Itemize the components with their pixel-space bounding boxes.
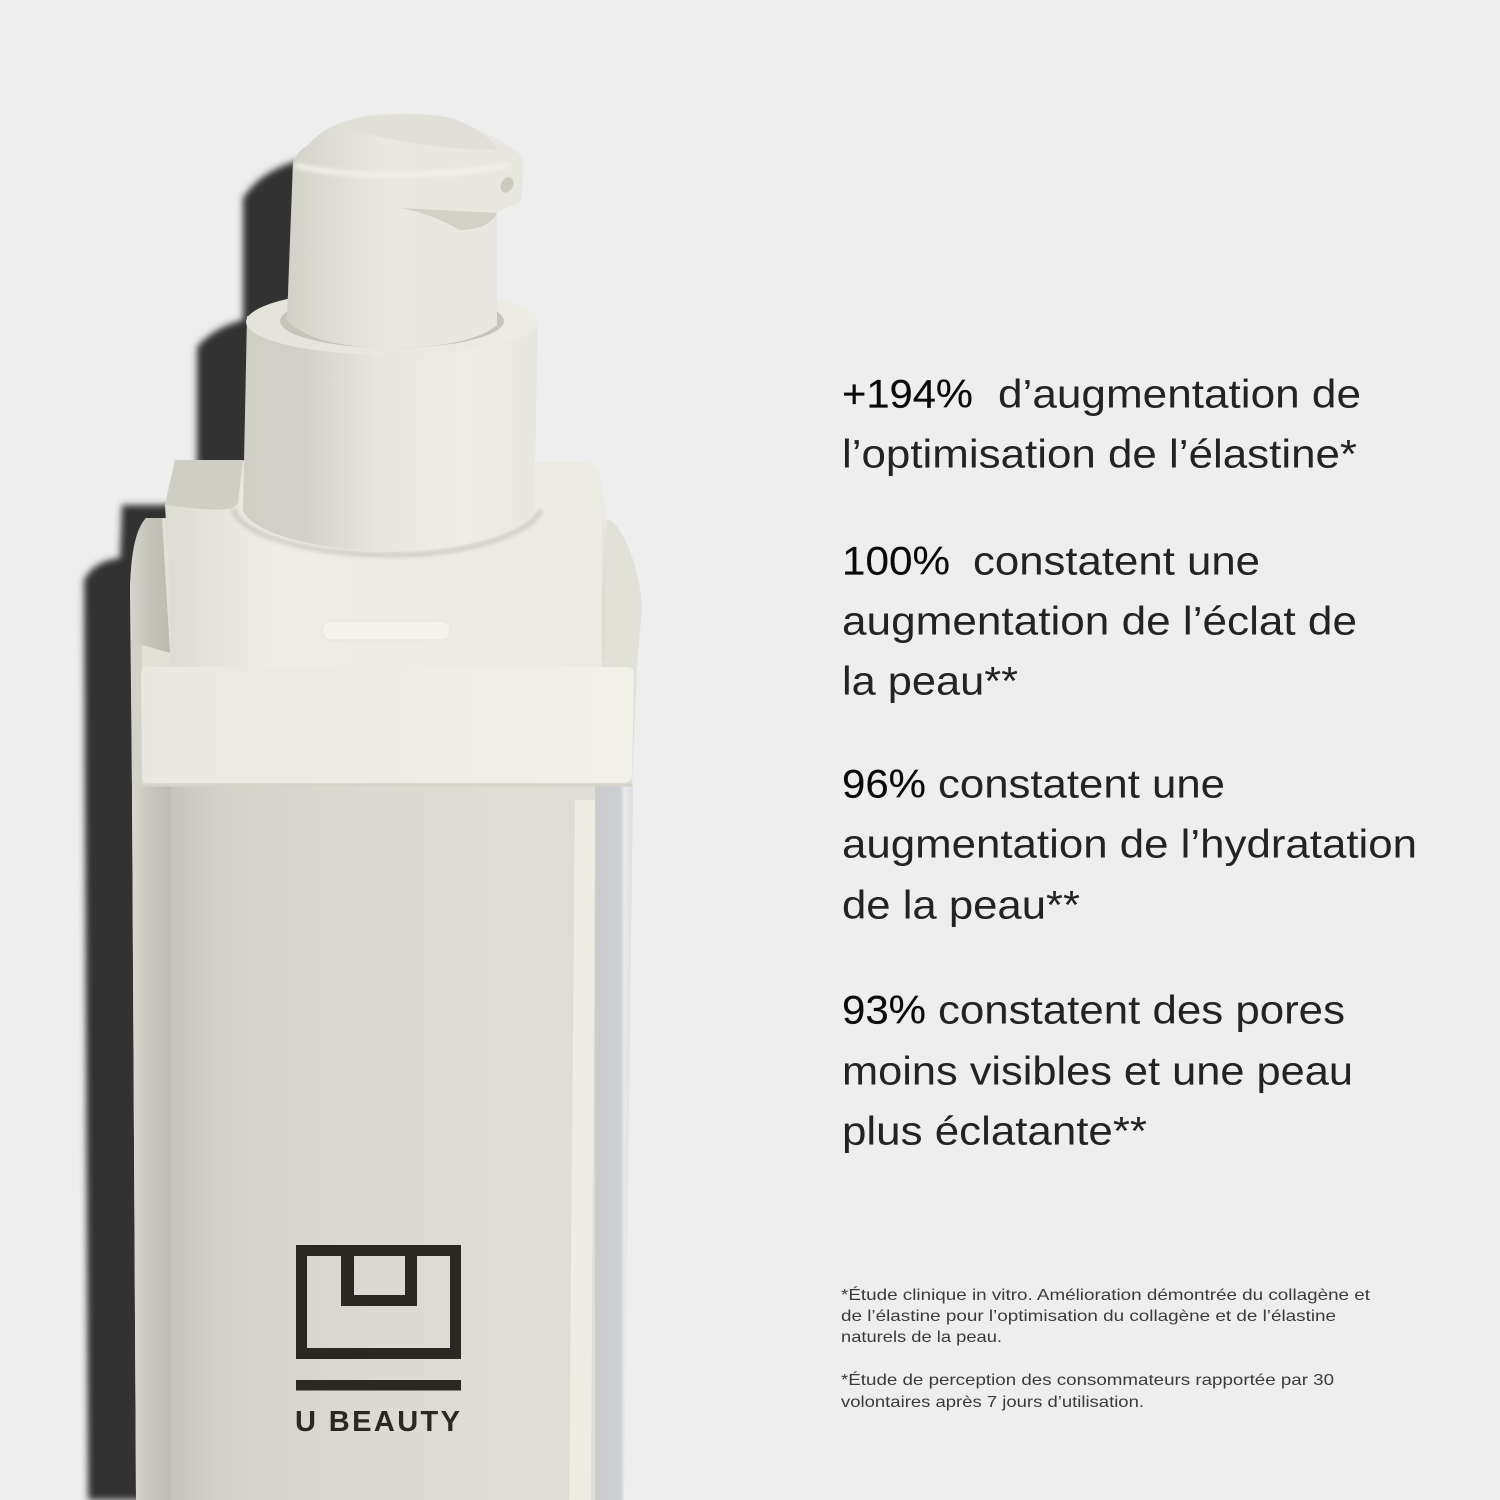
stat: pores <box>842 988 1353 1154</box>
bottle right clear strip <box>590 785 633 1500</box>
collar opening <box>280 294 504 348</box>
nozzle notch shadow <box>400 208 497 230</box>
logo mark <box>296 1245 461 1359</box>
stat: elastin: l’optimisation de l’élastine* <box>842 432 1357 476</box>
footnote: consumer study <box>841 1370 1334 1411</box>
stat: pores: 93% <box>842 988 926 1032</box>
footnote: in vitro study: de l’élastine pour l’optimisation du collagène et de l’élastine <box>841 1308 1336 1325</box>
shell left edge beside band <box>131 640 142 785</box>
stat: radiance: augmentation de l’éclat de <box>842 600 1357 644</box>
bottle left clear strip <box>132 785 171 1500</box>
stat: pores: constatent des pores <box>938 988 1345 1032</box>
bottle rear shell <box>130 518 642 1500</box>
stat: hydration <box>842 762 1417 928</box>
footnote: consumer study: *Étude de perception des consommateurs rapportée par 30 <box>841 1370 1334 1389</box>
stat: hydration: augmentation de l’hydratation <box>842 822 1417 866</box>
stat: radiance: la peau** <box>842 660 1018 704</box>
brand logo <box>295 1245 461 1438</box>
footnote: in vitro study: *Étude clinique in vitro. Amélioration démontrée du collagène et <box>841 1285 1371 1304</box>
stat: radiance: constatent une <box>973 540 1260 584</box>
stat: radiance: 100% <box>842 540 950 584</box>
logo bar <box>296 1380 461 1390</box>
cast shadow of bottle <box>84 160 300 1500</box>
stat: pores: plus éclatante** <box>842 1110 1147 1154</box>
band lower seam <box>141 784 632 786</box>
pump head rim highlight <box>296 165 510 175</box>
footnote: consumer study: volontaires après 7 jours d’utilisation. <box>841 1394 1144 1411</box>
bottle cream edge <box>569 800 595 1500</box>
stat: elastin: d’augmentation de <box>998 372 1361 416</box>
stat: elastin: +194% <box>842 372 973 416</box>
footnote: in vitro study <box>841 1285 1371 1346</box>
stat: hydration: de la peau** <box>842 884 1080 928</box>
cap front crease <box>172 588 600 592</box>
stat: hydration: constatent une <box>938 762 1225 806</box>
cap top-left facet <box>165 460 243 510</box>
cap upper block <box>165 460 607 667</box>
product: pump bottle <box>130 113 642 1500</box>
pump collar <box>243 316 538 551</box>
stat: pores: moins visibles et une peau <box>842 1050 1353 1094</box>
pump top dome <box>338 114 498 150</box>
collar rim <box>246 289 538 355</box>
nozzle opening <box>498 175 516 195</box>
cap right facet line <box>602 520 605 660</box>
cap tab <box>322 621 450 640</box>
stat: elastin <box>842 372 1361 476</box>
stat: hydration: 96% <box>842 762 926 806</box>
collar seat shadow <box>233 508 541 555</box>
cap base band <box>141 667 634 783</box>
footnote: in vitro study: naturels de la peau. <box>841 1329 1002 1346</box>
bottle label panel <box>171 785 595 1500</box>
pump stem and head <box>287 113 523 348</box>
cap left side piece <box>130 518 170 653</box>
logo wordmark: U BEAUTY <box>295 1406 460 1438</box>
stat: radiance <box>842 540 1357 704</box>
